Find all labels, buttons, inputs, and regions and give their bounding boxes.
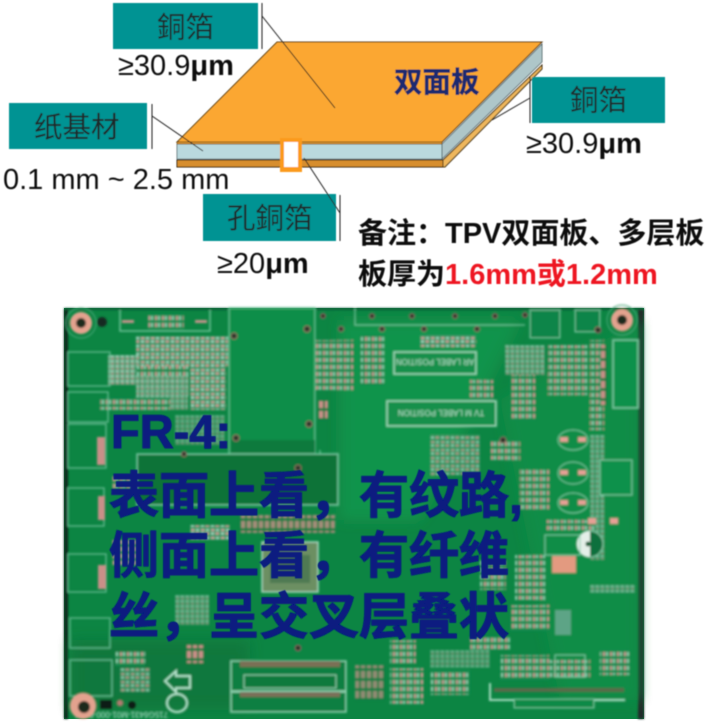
right-side connector — [355, 308, 638, 495]
board: paper substrate layer — [177, 44, 542, 159]
FR-4 overlay text: 表面上看，有纹路, — [109, 468, 523, 524]
callout: bottom copper foil: 銅箔 — [570, 85, 627, 117]
oval components — [545, 430, 588, 677]
left-column components — [112, 475, 209, 692]
chip — [262, 542, 318, 592]
note text: 备注：TPV双面板、多层板 — [358, 217, 704, 250]
dark rectangular zone — [137, 454, 338, 540]
PCB tonal shading — [70, 320, 640, 710]
FR-4 overlay text: 侧面上看，有纤维 — [109, 528, 509, 584]
label: AR position: AR LABEL POSITION — [396, 357, 474, 366]
small parts near bottom-left — [74, 700, 168, 719]
FR-4 overlay text: FR-4: — [111, 405, 231, 458]
callout: paper substrate: 纸基材 — [34, 112, 120, 144]
board label: 双面板 — [394, 67, 480, 99]
callout: top copper foil: 銅箔 — [157, 12, 214, 44]
FR-4 overlay text: 丝，呈交叉层叠状 — [109, 589, 509, 645]
FR-4 overlay text — [109, 405, 523, 645]
right-side parts — [355, 520, 635, 704]
PCB base — [64, 308, 644, 719]
callout: hole copper — [203, 158, 340, 280]
label: AR position — [394, 352, 476, 374]
note text: 板厚为1.6mm或1.2mm — [358, 258, 658, 291]
label: TV M position: TV M LABEL POSITION — [398, 408, 484, 417]
PCB edges — [64, 308, 644, 719]
board diagram — [3, 3, 704, 291]
component clusters — [100, 335, 604, 560]
callout: bottom copper foil — [492, 77, 665, 160]
note text — [358, 217, 704, 291]
callout: paper substrate: 0.1 mm ~ 2.5 mm — [3, 164, 229, 196]
bottom-right connector — [490, 683, 625, 708]
callout: hole copper: ≥20μm — [217, 248, 309, 280]
callout: top copper foil: ≥30.9μm — [118, 50, 234, 82]
callout: paper substrate — [3, 103, 229, 196]
board: top copper layer — [177, 42, 542, 144]
vias — [182, 312, 601, 651]
callout: top copper foil — [113, 3, 335, 108]
arrow marking — [165, 671, 190, 712]
callout: hole copper: 孔銅箔 — [227, 203, 313, 235]
small parts near bottom-left: 715G6431-M01-000-004X — [74, 710, 168, 719]
bottom-left connectors — [231, 661, 346, 712]
mounting holes — [66, 305, 637, 719]
PCB photo — [64, 305, 644, 719]
top-left connector outline — [120, 310, 210, 331]
label: TV M position — [387, 401, 496, 426]
callout: bottom copper foil: ≥30.9μm — [526, 128, 642, 160]
board: bottom copper layer — [177, 65, 542, 167]
left side ports — [68, 352, 112, 696]
via hole — [280, 138, 302, 172]
shielded plain zone — [229, 308, 320, 458]
